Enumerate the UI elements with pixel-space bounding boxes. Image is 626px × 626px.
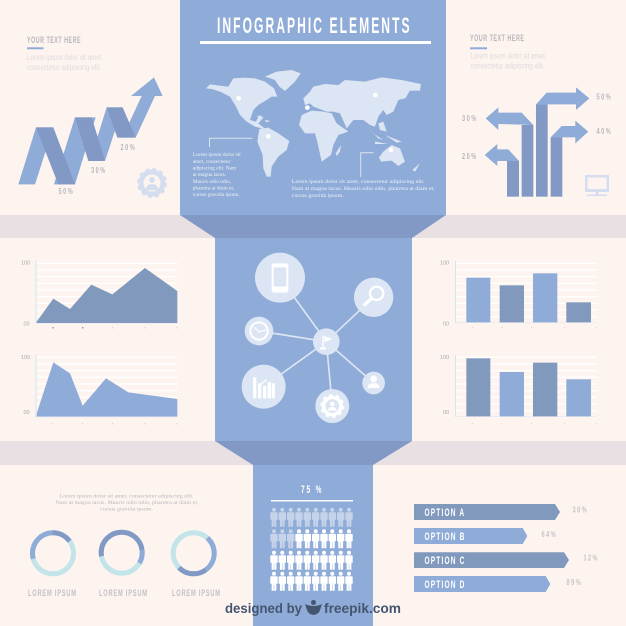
map callout left: Lorem ipsum dolor sit <box>193 152 241 158</box>
area chart 1 <box>35 261 177 328</box>
text block: bottom left: Nam at magna lacus. Mauris odio odio, pharetra at diam et, <box>56 500 199 506</box>
option B: OPTION B <box>424 530 465 542</box>
bar chart 1 axis labels: 100 <box>440 260 449 266</box>
arrow percent labels: 50% <box>596 94 612 102</box>
option B: 64% <box>542 531 557 539</box>
ribbon growth arrow <box>18 77 163 184</box>
map callout right: cursus gravida ipsum. <box>292 193 344 199</box>
panel: middle centre <box>215 238 412 441</box>
icon: phone <box>255 253 305 303</box>
map callout right <box>292 153 435 199</box>
area chart 2 <box>35 355 177 424</box>
text block: top left: Lorem ipsum dolor sit amet, <box>27 53 103 62</box>
ribbon percent labels: 30% <box>91 167 107 175</box>
bar chart 2 axis labels: 00 <box>443 410 449 416</box>
world map <box>206 70 421 177</box>
option D: OPTION D <box>424 578 465 590</box>
arrow percent labels: 40% <box>596 128 612 136</box>
donut 3 <box>173 533 214 574</box>
footer credit <box>225 600 401 616</box>
map callout right: Lorem ipsum dolor sit amet, consectetur adipiscing elit. <box>292 179 425 185</box>
map callout left: amet, consectetur <box>193 159 231 165</box>
arrow percent labels: 20% <box>462 153 478 161</box>
footer credit: designed by <box>225 601 302 616</box>
donut 2 label: LOREM IPSUM <box>99 588 148 598</box>
option C <box>414 552 599 568</box>
map callout left: Mauris odio odio, <box>193 179 232 185</box>
bar chart 1 axis labels: 00 <box>443 322 449 328</box>
map marker dots <box>236 93 393 152</box>
icon: flag hub <box>313 328 340 355</box>
direction arrows chart <box>485 87 589 197</box>
donut 3 label: LOREM IPSUM <box>172 588 221 598</box>
text block: top right <box>470 33 546 70</box>
fold: middle panel <box>215 441 412 465</box>
map callout left: adipiscing elit. Nam <box>193 166 237 172</box>
people stat underline <box>271 500 353 502</box>
map callout left <box>193 138 252 198</box>
option D: 89% <box>566 579 582 587</box>
text block: top left: consectetur adipiscing elit. <box>27 63 101 72</box>
donut 1 label: LOREM IPSUM <box>28 588 77 598</box>
people stat heading: 75 % <box>301 483 323 495</box>
option D <box>414 576 582 592</box>
band: upper fold <box>0 215 626 238</box>
icon: bar chart <box>242 365 286 409</box>
hub network diagram <box>242 253 393 423</box>
text block: top left <box>27 35 103 72</box>
area chart 1 axis labels <box>21 260 30 328</box>
text block: top right: YOUR TEXT HERE <box>470 33 524 43</box>
map callout left: cursus gravida ipsum. <box>193 192 240 198</box>
panel: top centre <box>180 0 446 215</box>
option A <box>414 504 588 520</box>
text block: bottom left <box>56 494 199 512</box>
option A: 30% <box>572 507 588 515</box>
icon: clock <box>245 317 273 345</box>
ribbon percent labels <box>58 144 136 196</box>
area chart 1 axis labels: 00 <box>24 322 30 328</box>
icon: person <box>362 372 385 394</box>
option A: OPTION A <box>424 506 465 518</box>
title: INFOGRAPHIC ELEMENTS <box>217 13 412 38</box>
pictogram: people grid <box>270 508 353 591</box>
donut 1 <box>32 533 74 574</box>
icon: gear with person <box>138 170 166 196</box>
icon: gear <box>315 389 349 423</box>
bar chart 1 axis labels <box>440 260 449 328</box>
area chart 2 axis labels: 100 <box>21 355 30 361</box>
map callout left: pharetra at diam et, <box>193 186 235 192</box>
map callout left: at magna lacus. <box>193 172 226 178</box>
option C: OPTION C <box>424 554 465 566</box>
footer credit: freepik.com <box>324 601 401 616</box>
arrow percent labels: 30% <box>462 115 478 123</box>
icon: monitor <box>585 175 609 196</box>
bar chart 1 <box>455 261 597 328</box>
area chart 1 axis labels: 100 <box>21 260 30 266</box>
text block: top right: consectetur adipiscing elit. <box>470 62 544 70</box>
option C: 12% <box>584 555 599 563</box>
map callout right: Nam at magna lacus. Mauris odio odio, pharetra at diam et, <box>292 186 435 192</box>
text block: top left: YOUR TEXT HERE <box>27 35 81 45</box>
ribbon percent labels: 50% <box>58 188 74 196</box>
icon: magnifier <box>354 278 393 317</box>
area chart 2 axis labels <box>21 355 30 416</box>
arrow percent labels <box>462 94 612 161</box>
fold: top panel <box>180 215 446 238</box>
text block: top right: Lorem ipsum dolor sit amet, <box>470 52 546 60</box>
bar chart 2 <box>455 355 597 424</box>
option B <box>414 528 557 544</box>
donut 2 <box>101 532 142 573</box>
title underline <box>200 41 431 44</box>
band: lower fold <box>0 441 626 465</box>
text block: bottom left: cursus gravida ipsum. <box>100 506 154 512</box>
text block: bottom left: Lorem ipsum dolor sit amet, consectetur adipiscing elit. <box>60 494 194 500</box>
ribbon percent labels: 20% <box>120 144 136 152</box>
bar chart 2 axis labels <box>440 355 449 416</box>
bar chart 2 axis labels: 100 <box>440 355 449 361</box>
area chart 2 axis labels: 00 <box>24 410 30 416</box>
panel: bottom centre <box>253 465 373 626</box>
